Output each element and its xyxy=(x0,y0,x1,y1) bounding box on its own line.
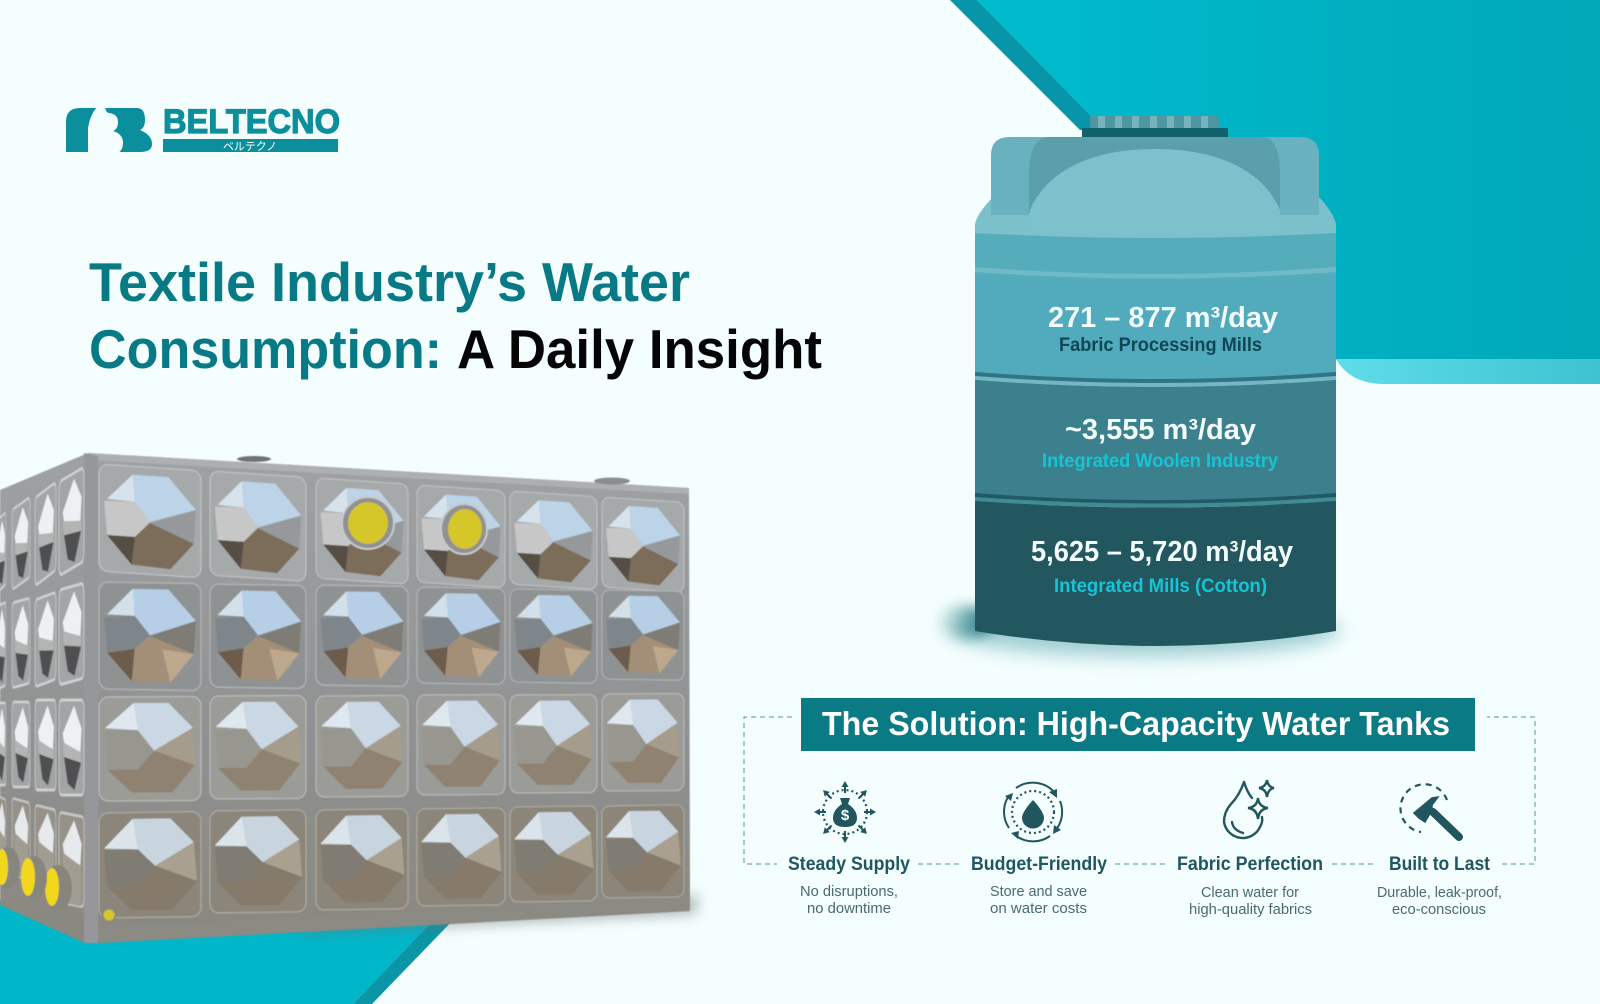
tier 1: fabric processing mills: 271 – 877 m³/day xyxy=(1048,302,1278,334)
item: budget-friendly: on water costs xyxy=(990,901,1087,917)
tank base shadow xyxy=(935,604,1340,656)
bottom-left teal shape xyxy=(0,900,458,1004)
item: built to last: Durable, leak-proof, xyxy=(1377,885,1502,901)
icon: water drop in recycling arrows xyxy=(1004,783,1062,841)
item: steady supply: Steady Supply xyxy=(788,854,910,875)
icon: money bag with arrows: $ xyxy=(841,807,850,824)
front face row 1 panels xyxy=(99,464,684,592)
logo katakana bar xyxy=(163,139,338,153)
item: built to last: eco-conscious xyxy=(1392,902,1486,918)
logo: Beltecno xyxy=(66,103,340,153)
item: built to last xyxy=(1377,784,1502,918)
front face row 3 panels xyxy=(99,694,684,801)
dashed frame xyxy=(744,717,1535,864)
tank body frame xyxy=(0,453,690,943)
item: steady supply: No disruptions, xyxy=(800,884,898,900)
side face panels xyxy=(0,467,84,907)
title xyxy=(89,251,822,380)
title: A Daily Insight xyxy=(457,318,822,380)
cylindrical water tank chart xyxy=(935,116,1340,656)
item: steady supply: no downtime xyxy=(807,901,891,917)
logo wordmark: BELTECNO xyxy=(163,103,340,141)
item: built to last: Built to Last xyxy=(1389,854,1491,875)
tank drop shadow xyxy=(300,895,700,935)
item: fabric perfection xyxy=(1177,780,1323,918)
tank lid cap xyxy=(1082,116,1228,137)
tier 2: integrated woolen industry: ~3,555 m³/day xyxy=(1065,414,1256,446)
tier 2: integrated woolen industry xyxy=(1042,414,1278,472)
tier 1: fabric processing mills: Fabric Processing Mills xyxy=(1059,334,1262,356)
item: budget-friendly: Budget-Friendly xyxy=(971,854,1107,875)
front face row 2 panels xyxy=(99,582,684,691)
tier 1: fabric processing mills xyxy=(1048,302,1278,356)
tier 3: integrated mills cotton: 5,625 – 5,720 m³/day xyxy=(1031,536,1293,568)
solution section xyxy=(744,698,1535,918)
yellow side ports xyxy=(0,847,116,922)
item: fabric perfection: high-quality fabrics xyxy=(1189,902,1312,918)
logo katakana bar: ベルテクノ xyxy=(223,140,277,153)
item: budget-friendly: Store and save xyxy=(990,884,1087,900)
item: fabric perfection: Fabric Perfection xyxy=(1177,854,1323,875)
solution banner: The Solution: High-Capacity Water Tanks xyxy=(822,705,1450,742)
item: fabric perfection: Clean water for xyxy=(1201,885,1299,901)
tier 3: integrated mills cotton: Integrated Mills (Cotton) xyxy=(1054,575,1267,597)
front face row 4 panels xyxy=(99,805,684,918)
stainless steel panel tank photo illustration xyxy=(0,453,700,943)
tank shoulder and dome xyxy=(975,137,1336,240)
roof fittings xyxy=(237,456,630,484)
icon: hammer in dashed arc xyxy=(1400,784,1459,837)
solution banner xyxy=(801,698,1475,751)
tank bands xyxy=(975,233,1336,646)
logo mark xyxy=(66,107,152,153)
title: Textile Industry’s Water xyxy=(89,251,690,313)
tier 3: integrated mills cotton xyxy=(1031,536,1293,597)
title: Consumption: xyxy=(89,318,442,380)
icon: water drop with sparkles xyxy=(1224,780,1274,838)
top-right teal shape xyxy=(950,0,1600,384)
item: budget-friendly xyxy=(971,783,1107,917)
tier 2: integrated woolen industry: Integrated Woolen Industry xyxy=(1042,450,1278,472)
yellow flange ports on upper row xyxy=(342,497,487,554)
item: steady supply xyxy=(788,781,910,917)
